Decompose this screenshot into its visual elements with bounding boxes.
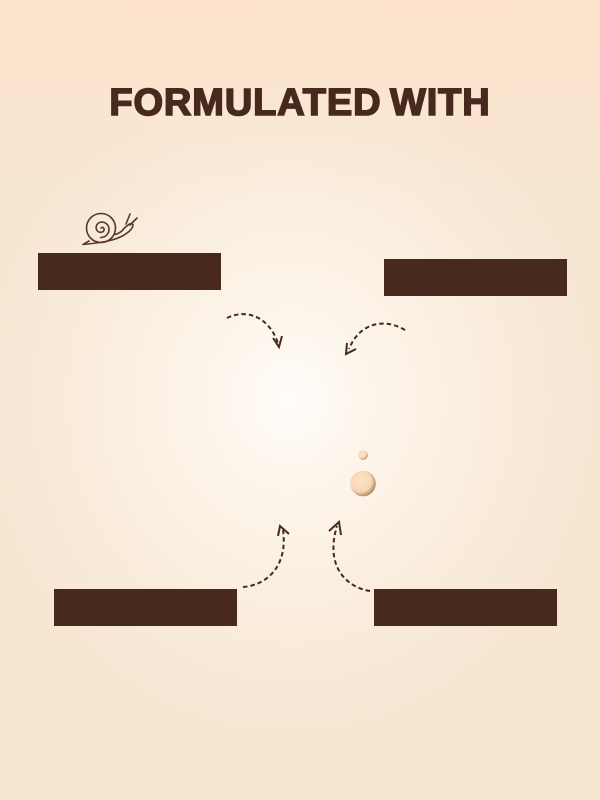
- arrow: top right: [346, 324, 405, 354]
- panel: bottom left bar: [54, 589, 237, 626]
- panel: top right bar: [384, 259, 567, 296]
- arrow: bottom left: [243, 526, 289, 587]
- arrow: bottom right: [329, 522, 370, 591]
- icon: small droplet: [358, 450, 368, 460]
- panel: top left bar: [38, 253, 221, 290]
- title: FORMULATED WITH: [109, 82, 491, 124]
- panel: bottom right bar: [374, 589, 557, 626]
- icon: snail: [83, 214, 137, 244]
- arrow: top left: [227, 314, 282, 347]
- icon: large droplet: [350, 471, 376, 496]
